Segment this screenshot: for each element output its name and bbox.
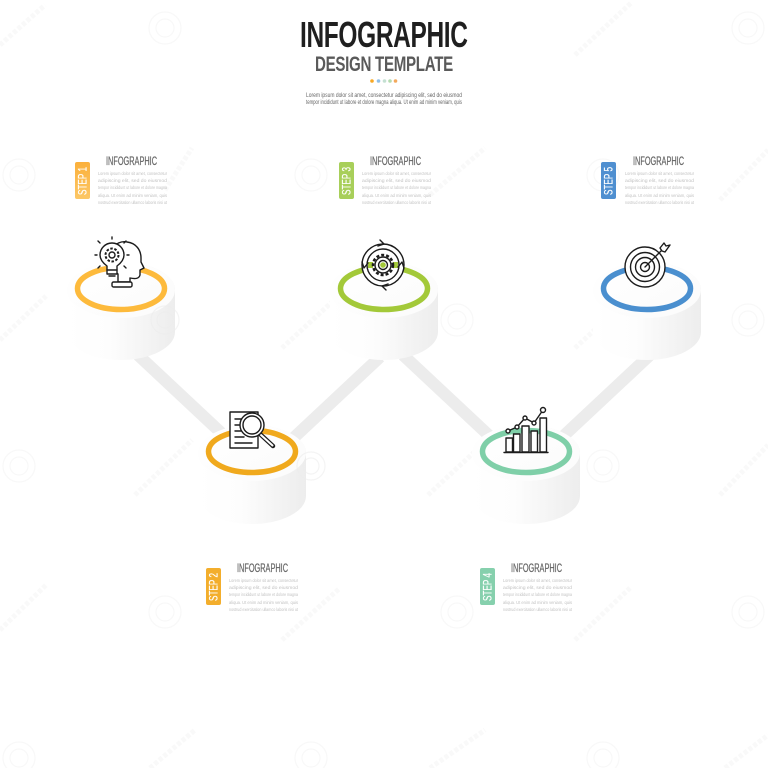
top face 5	[593, 262, 701, 318]
intro text: tempor incididunt ut labore et dolore magna aliqua. Ut enim ad minim veniam, quis	[306, 100, 462, 106]
step 5 body: nostrud exercitation ullamco laboris nisi ut	[625, 200, 695, 205]
step 5 body: aliqua. Ut enim ad minim veniam, quis	[625, 193, 695, 198]
step 2 text block	[206, 561, 299, 612]
cylinder 3	[330, 262, 438, 360]
step 1 body: Lorem ipsum dolor sit amet, consectetur	[98, 171, 167, 176]
step 1 heading: INFOGRAPHIC	[106, 154, 157, 168]
step 2 body: aliqua. Ut enim ad minim veniam, quis	[229, 600, 299, 605]
step 5 tab	[601, 162, 616, 199]
ring 3	[340, 268, 428, 310]
connector bands	[138, 355, 650, 445]
top face 4	[472, 425, 580, 481]
ring 1	[78, 268, 164, 310]
cylinder 4	[472, 425, 580, 524]
step 2 body: Lorem ipsum dolor sit amet, consectetur	[229, 578, 298, 583]
icon: head with lightbulb gear	[95, 237, 144, 287]
ring 5	[604, 268, 690, 310]
step 5 heading: INFOGRAPHIC	[633, 154, 684, 168]
step 4 body: adipiscing elit, sed do eiusmod	[503, 585, 572, 590]
step 5 body: adipiscing elit, sed do eiusmod	[625, 178, 694, 183]
step 1 body: tempor incididunt ut labore et dolore magna	[98, 185, 167, 190]
step 3 heading: INFOGRAPHIC	[370, 154, 421, 168]
icon: bar chart with trend line	[504, 408, 548, 452]
step 4 body: Lorem ipsum dolor sit amet, consectetur	[503, 578, 572, 583]
step 3 body: tempor incididunt ut labore et dolore magna	[362, 185, 431, 190]
step 4 tab	[480, 568, 495, 605]
icon: target with arrow	[625, 243, 670, 287]
step 5 station	[593, 243, 701, 360]
step 4 text block	[480, 561, 573, 612]
step 5 body: tempor incididunt ut labore et dolore magna	[625, 185, 694, 190]
step 2 body: nostrud exercitation ullamco laboris nisi ut	[229, 607, 299, 612]
top face 1	[67, 262, 175, 318]
step 1 body	[98, 171, 168, 205]
step 5 body	[625, 171, 695, 205]
step 3 text block	[339, 154, 432, 205]
step 4 body: nostrud exercitation ullamco laboris nisi ut	[503, 607, 573, 612]
subtitle: DESIGN TEMPLATE	[315, 51, 453, 76]
step 4 body	[503, 578, 573, 612]
cylinder 5	[593, 262, 701, 360]
step 3 body: adipiscing elit, sed do eiusmod	[362, 178, 431, 183]
step 5 body: Lorem ipsum dolor sit amet, consectetur	[625, 171, 694, 176]
step 3 body: aliqua. Ut enim ad minim veniam, quis	[362, 193, 432, 198]
step 3 tab label: STEP 3	[340, 167, 354, 195]
decorative colour dots	[370, 79, 397, 83]
step 3 tab	[339, 162, 354, 199]
step 3 body: nostrud exercitation ullamco laboris nisi ut	[362, 200, 432, 205]
step 2 tab label: STEP 2	[206, 573, 220, 601]
step 3 body	[362, 171, 432, 205]
step 3 station	[330, 240, 438, 360]
step 2 station	[198, 412, 306, 524]
step 4 heading: INFOGRAPHIC	[511, 561, 562, 575]
step 2 tab	[206, 568, 221, 605]
step 2 body: tempor incididunt ut labore et dolore magna	[229, 592, 298, 597]
step 2 heading: INFOGRAPHIC	[237, 561, 288, 575]
step 4 body: tempor incididunt ut labore et dolore magna	[503, 592, 572, 597]
title: INFOGRAPHIC	[300, 14, 468, 55]
step 2 body: adipiscing elit, sed do eiusmod	[229, 585, 298, 590]
icon: gear in circular arrows	[362, 240, 404, 290]
step 2 body	[229, 578, 299, 612]
ring 2	[208, 430, 296, 472]
step 5 tab label: STEP 5	[602, 167, 616, 195]
step 1 tab label: STEP 1	[76, 167, 90, 195]
top face 2	[198, 425, 306, 481]
cylinder 2	[198, 425, 306, 524]
step 1 body: aliqua. Ut enim ad minim veniam, quis	[98, 193, 168, 198]
step 3 body: Lorem ipsum dolor sit amet, consectetur	[362, 171, 431, 176]
icon: document with magnifier	[230, 412, 273, 448]
step 1 body: nostrud exercitation ullamco laboris nisi ut	[98, 200, 168, 205]
cylinder 1	[67, 262, 175, 360]
step 1 tab	[75, 162, 90, 199]
step 1 body: adipiscing elit, sed do eiusmod	[98, 178, 167, 183]
step 4 body: aliqua. Ut enim ad minim veniam, quis	[503, 600, 573, 605]
ring 4	[482, 430, 570, 472]
step 4 station	[472, 408, 580, 524]
step 1 text block	[75, 154, 168, 205]
step 5 text block	[601, 154, 695, 205]
intro text: Lorem ipsum dolor sit amet, consectetur adipiscing elit, sed do eiusmod	[306, 93, 462, 99]
step 1 station	[67, 237, 175, 360]
intro text	[306, 93, 462, 106]
top face 3	[330, 262, 438, 318]
step 4 tab label: STEP 4	[480, 573, 494, 601]
